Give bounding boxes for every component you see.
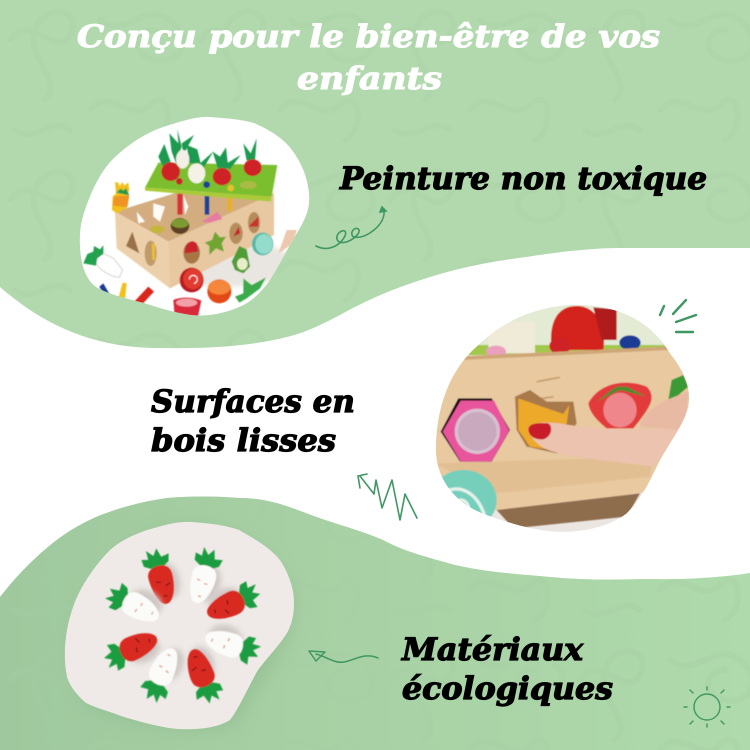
red wheel: [180, 268, 204, 292]
heading: eco materials: Matériaux: [401, 632, 584, 668]
icon: sun: [684, 687, 730, 727]
green board: [145, 163, 277, 197]
apple piece: [173, 298, 201, 317]
title: [77, 19, 660, 97]
green leaves: [235, 277, 266, 303]
pegs: [177, 193, 183, 215]
dragon fruit hexagon: [441, 398, 510, 462]
photo: toy box on white blob: [80, 116, 310, 316]
wood grain: [533, 377, 560, 400]
white wave band: [0, 248, 750, 597]
heading: smooth wood surfaces: bois lisses: [151, 423, 336, 459]
strawberry: [588, 383, 652, 428]
heading: eco materials: [401, 632, 613, 707]
banana hole: [515, 390, 577, 453]
wood panel: [436, 346, 689, 510]
carrot: white 1: [190, 546, 224, 604]
soft shadow under carrot plate: [70, 525, 295, 730]
lower green area: [0, 496, 750, 750]
background doodles: [0, 0, 750, 360]
photo: finger on wooden box: [436, 305, 689, 532]
photo: carrots on white blob: [60, 517, 300, 737]
carrot: red 2: [206, 580, 260, 620]
title: enfants: [297, 61, 442, 97]
lower doodles: [0, 496, 750, 750]
carrot: white 2: [102, 574, 167, 630]
title: Conçu pour le bien-être de vos: [77, 19, 660, 55]
arrow left of heading: [309, 651, 378, 662]
orange piece: [207, 279, 231, 303]
wooden box: [115, 192, 274, 288]
carrot: white 3: [205, 622, 262, 666]
background toys: [478, 305, 664, 346]
carrot: red 3: [104, 632, 162, 672]
star piece: [205, 232, 226, 255]
heading: smooth wood surfaces: [151, 384, 355, 459]
finger: [278, 230, 297, 253]
radishes: [158, 129, 257, 170]
finger: [528, 403, 689, 467]
teal wheel: [252, 233, 273, 255]
loose pegs: [98, 282, 110, 294]
carrot: red 1: [139, 545, 185, 607]
heading: non-toxic paint: Peinture non toxique: [339, 161, 707, 197]
carrot: white 4: [140, 647, 186, 704]
carrot: red 4: [186, 645, 224, 704]
rays icon: [660, 300, 696, 332]
pineapple: [112, 182, 129, 213]
zigzag arrow: [358, 474, 417, 520]
white carrot: [96, 253, 123, 277]
box shadow: [180, 246, 286, 292]
teal wheel: [442, 470, 498, 517]
heading: eco materials: écologiques: [402, 671, 613, 707]
pear: [232, 246, 250, 273]
shadow below box: [497, 493, 640, 528]
kiwi slice: [668, 375, 688, 400]
squiggle arrow right of toy box: [316, 207, 386, 248]
heading: smooth wood surfaces: Surfaces en: [151, 384, 355, 420]
